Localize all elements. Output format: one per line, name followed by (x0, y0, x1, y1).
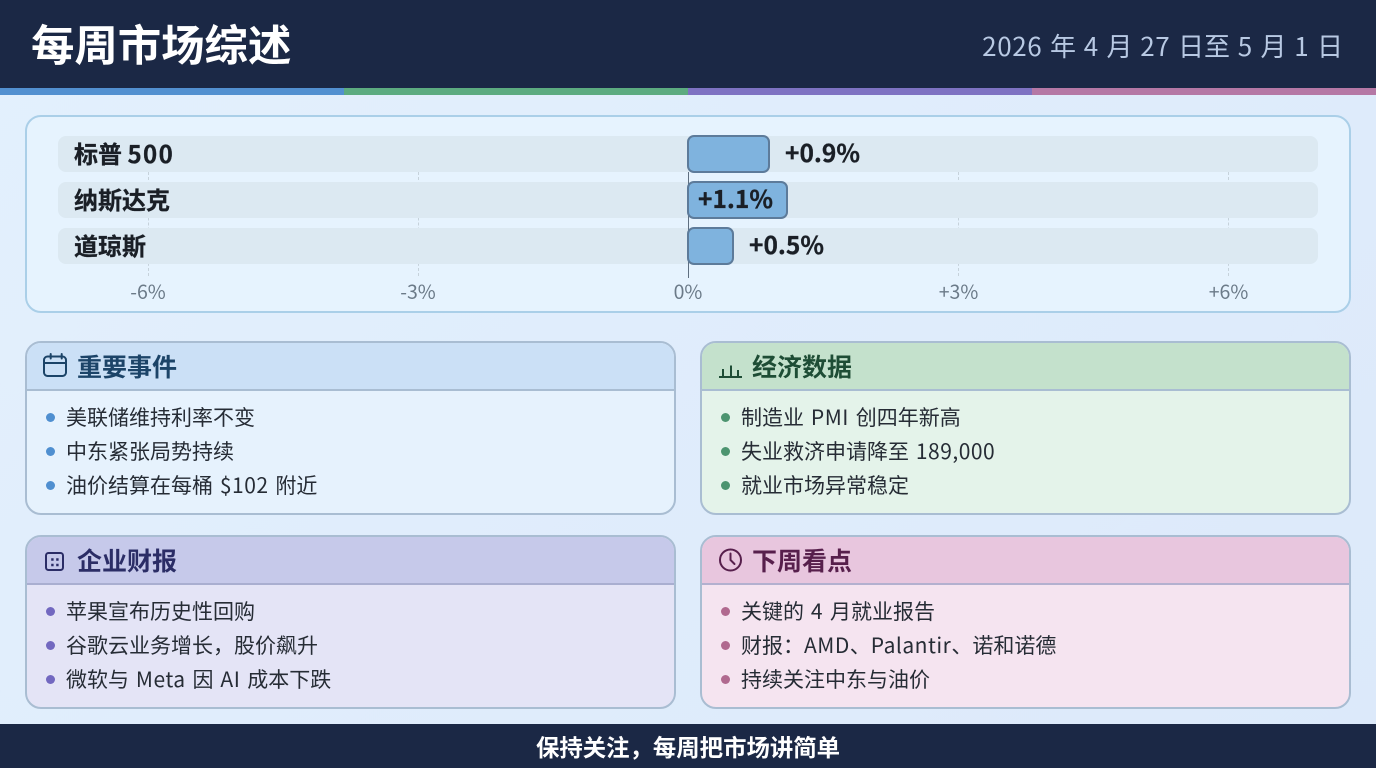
icon: clock (719, 548, 742, 572)
panel: economic data (700, 341, 1351, 515)
list: 失业救济申请降至 189,000 (741, 436, 995, 466)
date range: 2026 年 4 月 27 日至 5 月 1 日 (982, 27, 1343, 64)
icon: building (45, 552, 64, 571)
list: 财报：AMD、Palantir、诺和诺德 (741, 630, 1056, 660)
row: S&P 500: 标普 500 (74, 135, 174, 170)
axis labels: -6% (130, 276, 166, 305)
list (46, 402, 317, 500)
axis labels: +6% (1209, 276, 1248, 305)
list: 油价结算在每桶 $102 附近 (66, 470, 317, 500)
heading (27, 343, 674, 391)
row: S&P 500: +0.9% (785, 135, 860, 170)
axis labels: -3% (400, 276, 436, 305)
heading: 重要事件 (77, 348, 177, 384)
heading (702, 537, 1349, 585)
list: 微软与 Meta 因 AI 成本下跌 (66, 664, 331, 694)
title: 每周市场综述 (31, 12, 291, 74)
icon: calendar (43, 353, 67, 377)
row: Dow Jones: +0.5% (749, 227, 824, 262)
panel: earnings (25, 535, 676, 709)
axis labels: +3% (939, 276, 978, 305)
list: 就业市场异常稳定 (741, 470, 909, 500)
list: 苹果宣布历史性回购 (66, 596, 255, 626)
row: Dow Jones: 道琼斯 (74, 227, 146, 262)
heading: 下周看点 (752, 542, 852, 578)
panel: key events (25, 341, 676, 515)
row: Nasdaq: +1.1% (698, 181, 773, 216)
axis labels: 0% (674, 276, 702, 305)
list: 关键的 4 月就业报告 (741, 596, 935, 626)
icon: bar chart (719, 366, 742, 378)
axis labels (130, 276, 1248, 305)
heading: 企业财报 (77, 542, 177, 578)
list: 美联储维持利率不变 (66, 402, 255, 432)
footer (0, 724, 1376, 768)
header bar (0, 0, 1376, 88)
row: Nasdaq: 纳斯达克 (74, 181, 170, 216)
heading (27, 537, 674, 585)
list: 持续关注中东与油价 (741, 664, 930, 694)
heading (702, 343, 1349, 391)
panel: index bar chart (25, 115, 1351, 313)
list (721, 596, 1056, 694)
colour stripe (0, 88, 1376, 95)
list (46, 596, 331, 694)
list: 制造业 PMI 创四年新高 (741, 402, 961, 432)
panel: next week (700, 535, 1351, 709)
heading: 经济数据 (752, 348, 852, 384)
list: 中东紧张局势持续 (66, 436, 234, 466)
list: 谷歌云业务增长，股价飙升 (66, 630, 318, 660)
footer: 保持关注，每周把市场讲简单 (536, 729, 840, 763)
row: S&P 500 (74, 135, 860, 173)
list (721, 402, 995, 500)
row: Dow Jones (74, 227, 824, 265)
row: Nasdaq (74, 181, 788, 219)
